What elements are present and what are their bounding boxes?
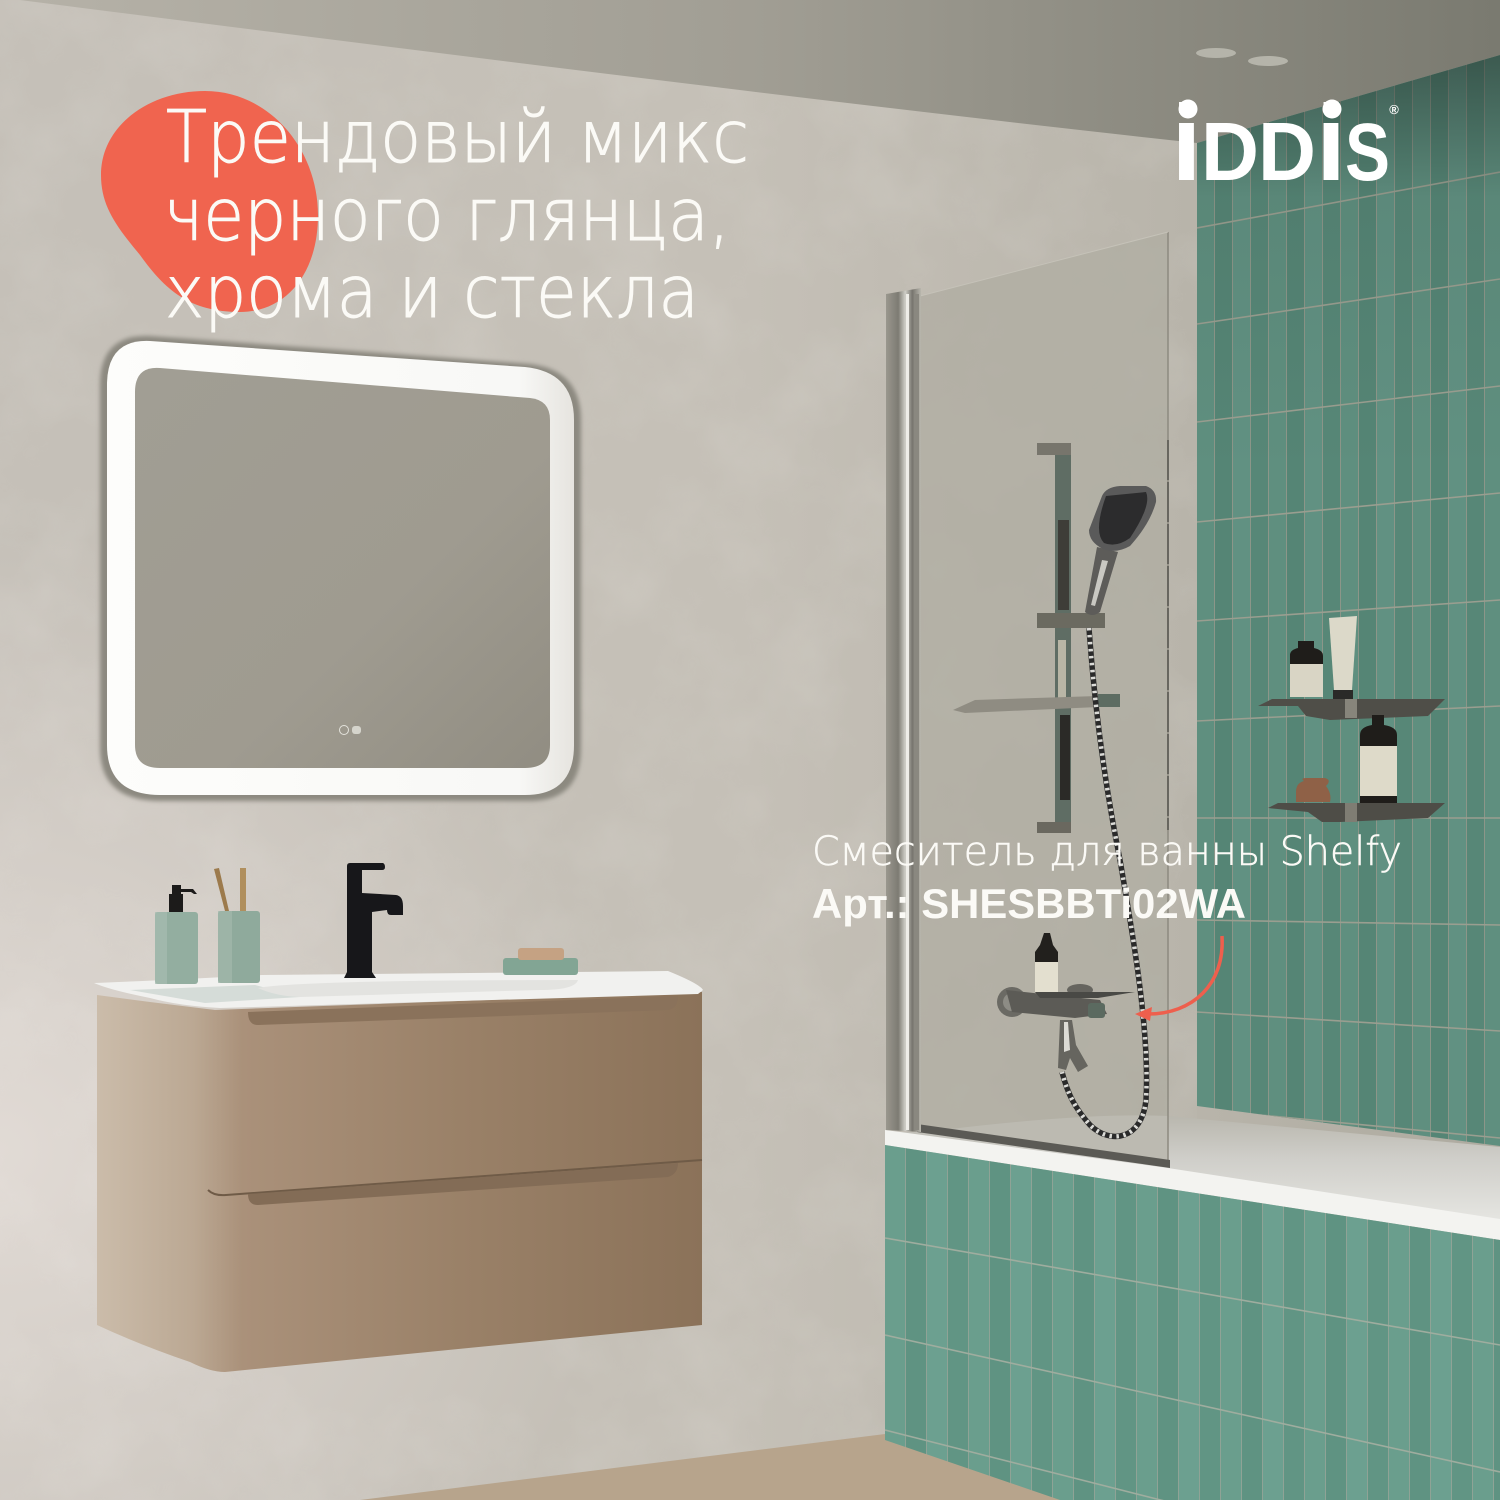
scene: bathtub interior — [885, 1115, 1500, 1225]
icon: counter reflection — [130, 985, 300, 1003]
icon: drawer seam — [208, 1160, 702, 1195]
icon: coral blob — [101, 91, 318, 312]
scene: green wall tiles — [1197, 50, 1500, 1150]
title: Трендовый микс — [166, 95, 749, 179]
logo: IDDIS: D — [1201, 105, 1259, 198]
panel: wash basin counter — [94, 971, 703, 1008]
scene: bathtub tile front — [885, 1140, 1500, 1500]
icon: ceiling spot lights — [1196, 48, 1288, 66]
callout: product name and article: Арт.: SHESBBTi02WA — [812, 880, 1246, 927]
icon: shower head — [1085, 486, 1156, 615]
icon: lower wall shelf with products — [1268, 715, 1445, 822]
icon: upper wall shelf with products — [1258, 616, 1445, 720]
icon: chrome wall profile — [886, 288, 921, 1132]
title: хрома и стекла — [165, 250, 699, 334]
title: черного глянца, — [164, 173, 730, 257]
title — [164, 95, 749, 334]
icon: soap dish — [503, 948, 578, 975]
icon: drawer handle top — [248, 996, 678, 1025]
icon: drawer handle bottom — [248, 1163, 678, 1205]
icon: soap dispenser — [155, 885, 198, 984]
icon: toothbrush cup — [214, 868, 260, 983]
icon: braided shower hose — [1062, 628, 1147, 1136]
scene: bathtub white rim — [885, 1130, 1500, 1240]
logo: IDDIS: ® — [1389, 102, 1399, 117]
callout: product name and article: Смеситель для ванны Shelfy — [812, 829, 1402, 875]
logo: IDDIS: S — [1345, 107, 1390, 198]
icon: bath mixer — [997, 933, 1135, 1072]
panel: LED mirror — [100, 336, 581, 801]
icon: black basin faucet — [344, 863, 403, 978]
scene: ceiling — [0, 0, 1500, 143]
logo: IDDIS: i — [1172, 82, 1202, 203]
arrow: callout to mixer — [1135, 936, 1222, 1021]
logo: IDDIS: D — [1258, 105, 1316, 198]
icon: slide rail — [953, 443, 1120, 833]
scene: floor — [360, 1434, 1062, 1500]
icon: mirror touch buttons — [340, 726, 361, 734]
logo: IDDIS: i — [1316, 82, 1346, 203]
panel: glass shower screen — [917, 232, 1170, 1168]
logo: IDDIS — [1172, 82, 1399, 203]
panel: vanity cabinet — [97, 992, 702, 1372]
icon: basin bowl — [258, 980, 578, 997]
callout: product name and article — [812, 829, 1402, 927]
